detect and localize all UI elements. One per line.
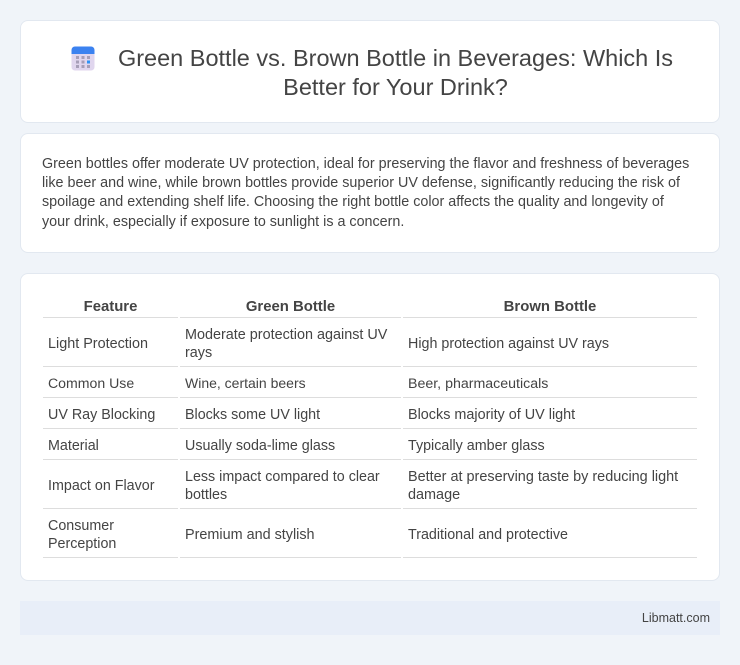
row: impact on flavor: bottles <box>185 487 227 503</box>
panel: comparison table <box>20 273 720 581</box>
row: consumer perception: Traditional and protective <box>408 527 568 543</box>
row: consumer perception: Premium and stylish <box>185 527 315 543</box>
row: common use: Common Use <box>48 375 134 391</box>
row: consumer perception <box>48 518 568 552</box>
intro text: spoilage and extending shelf life. Choosing the right bottle color affects the quality and longevity of <box>42 194 664 210</box>
table header <box>84 299 596 315</box>
row: material: Material <box>48 438 99 454</box>
intro text: your drink, especially if exposure to sunlight is a concern. <box>42 214 404 230</box>
panel: intro paragraph <box>20 133 720 253</box>
footer bar <box>20 601 720 635</box>
row: uv ray blocking: UV Ray Blocking <box>48 407 155 423</box>
row: light protection <box>48 327 609 361</box>
intro text: like beer and wine, while brown bottles provide superior UV defense, significantly reducing the risk of <box>42 175 680 191</box>
title: Green Bottle vs. Brown Bottle in Beverages: Which Is <box>118 45 673 71</box>
row: material: Typically amber glass <box>408 438 545 454</box>
row: common use <box>48 375 548 392</box>
row: impact on flavor: Better at preserving taste by reducing light <box>408 469 678 485</box>
row: impact on flavor: Less impact compared to clear <box>185 469 380 485</box>
table header: Green Bottle <box>246 299 335 315</box>
table header: Feature <box>84 299 137 315</box>
row: uv ray blocking: Blocks some UV light <box>185 407 320 423</box>
icon: calendar <box>72 46 94 70</box>
row: uv ray blocking: Blocks majority of UV light <box>408 407 575 423</box>
row: impact on flavor: Impact on Flavor <box>48 478 154 494</box>
row: common use: Wine, certain beers <box>185 375 306 391</box>
row: impact on flavor <box>48 469 678 503</box>
row: consumer perception: Consumer <box>48 518 114 534</box>
row: consumer perception: Perception <box>48 536 116 552</box>
row: uv ray blocking <box>48 407 576 423</box>
row: impact on flavor: damage <box>408 487 460 503</box>
row: light protection: High protection against UV rays <box>408 336 609 352</box>
intro text <box>42 156 689 230</box>
row: material <box>48 438 545 454</box>
panel: title card <box>20 20 720 123</box>
footer credit: Libmatt.com <box>642 611 710 625</box>
table header: Brown Bottle <box>504 299 596 315</box>
row: material: Usually soda-lime glass <box>185 438 335 454</box>
row: common use: Beer, pharmaceuticals <box>408 376 548 392</box>
title <box>118 45 673 100</box>
row: light protection: Light Protection <box>48 336 148 352</box>
title: Better for Your Drink? <box>283 74 508 100</box>
row: light protection: rays <box>185 345 212 361</box>
row: light protection: Moderate protection against UV <box>185 327 387 343</box>
intro text: Green bottles offer moderate UV protection, ideal for preserving the flavor and freshness of beverages <box>42 156 689 172</box>
